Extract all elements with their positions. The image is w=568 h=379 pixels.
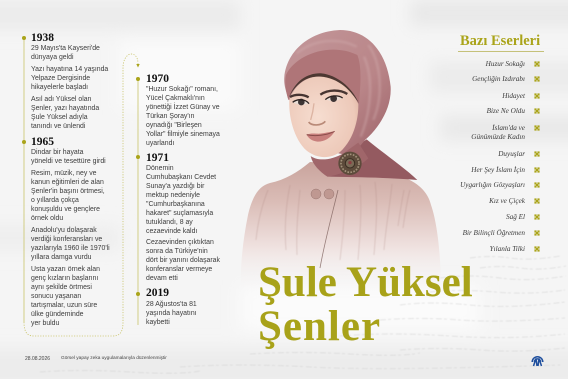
text: after prison: dört bir yanını dolaşarak xyxy=(146,256,220,264)
text: death: yaşında hayatını xyxy=(146,310,197,316)
works list: Kız ve Çiçek xyxy=(489,196,525,204)
works list: Bir Bilinçli Öğretmen xyxy=(463,228,525,236)
text: pen name: Şenler, yazı hayatında xyxy=(31,105,99,112)
works list: Duyuşlar xyxy=(498,150,525,158)
works list: Sağ El xyxy=(506,212,525,220)
text: film adaptation: uyarlandı xyxy=(146,140,174,146)
text: arrest: mektup nedeniyle xyxy=(146,192,200,198)
text: arrest: Dönemin xyxy=(146,164,174,172)
works list: İslam'da ve xyxy=(492,124,525,132)
text: birth: 29 Mayıs'ta Kayseri'de xyxy=(31,44,100,52)
text: conferences: yıllara damga vurdu xyxy=(31,254,92,260)
text: arrest: tutuklandı, 8 ay xyxy=(146,218,193,226)
text: faith xyxy=(31,148,106,164)
text: film adaptation: Türkan Şoray'ın xyxy=(146,112,194,120)
title: name xyxy=(258,259,473,350)
text: pen name: tanındı ve ünlendi xyxy=(31,123,85,130)
text: film adaptation: Yollar" filmiyle sinemaya xyxy=(146,130,220,138)
text: faith: Dindar bir hayata xyxy=(31,148,83,156)
title: name: Şenler xyxy=(258,303,381,350)
text: birth xyxy=(31,44,100,60)
text: conferences: yazılarıyla 1960 ile 1970'li xyxy=(31,244,110,252)
text: influence: genç kızların başlarını xyxy=(31,274,98,282)
facial features xyxy=(290,91,347,142)
text: education: konuşuldu ve gençlere xyxy=(31,206,100,212)
icon: agency logo xyxy=(531,356,544,366)
dress xyxy=(241,162,441,292)
works list: Hidayet xyxy=(502,92,525,100)
text: film adaptation: yönettiği İzzet Günay ve xyxy=(146,104,220,110)
works list: Günümüzde Kadın xyxy=(471,132,525,140)
year 1965: 1965 xyxy=(31,136,54,148)
text: arrest: Cumhubaşkanı Cevdet xyxy=(146,174,216,180)
text: after prison: konferanslar vermeye xyxy=(146,266,212,272)
footer date: 28.08.2026 xyxy=(25,356,50,362)
text: influence: sonucu yaşanan xyxy=(31,292,81,300)
text: arrest xyxy=(146,164,216,234)
text: influence: tartışmalar, uzun süre xyxy=(31,302,97,308)
text: after prison: Cezaevinden çıktıktan xyxy=(146,238,214,246)
timeline column two xyxy=(146,73,220,326)
year 2019: 2019 xyxy=(146,287,169,299)
works list: Gençliğin Izdırabı xyxy=(472,74,525,82)
text: arrest: "Cumhurbaşkanına xyxy=(146,200,205,208)
text: education xyxy=(31,170,105,222)
panel: selected works xyxy=(458,33,544,252)
text: early writing xyxy=(31,66,108,90)
text: pen name: Şule Yüksel adıyla xyxy=(31,114,88,121)
text: death: 28 Ağustos'ta 81 xyxy=(146,300,197,308)
text: film adaptation: oynadığı "Birleşen xyxy=(146,122,202,128)
text: influence: aynı şekilde örtmesi xyxy=(31,284,92,290)
text: education: örnek oldu xyxy=(31,214,63,222)
works list: Her Şey İslam İçin xyxy=(471,166,525,174)
text: after prison: devam etti xyxy=(146,274,178,282)
text: influence xyxy=(31,266,100,326)
text: education: o yıllarda çokça xyxy=(31,196,79,204)
text: death: kaybetti xyxy=(146,318,170,326)
text: conferences: Anadolu'yu dolaşarak xyxy=(31,226,97,234)
text: after prison xyxy=(146,238,220,282)
year 1971: 1971 xyxy=(146,152,169,164)
text: film adaptation: Yücel Çakmaklı'nın xyxy=(146,94,205,102)
footer note: Görsel yapay zeka uygulamalarıyla düzenlenmiştir xyxy=(61,356,167,361)
works list: Huzur Sokağı xyxy=(486,60,525,68)
text: film adaptation: "Huzur Sokağı" romanı, xyxy=(146,86,218,92)
text: death xyxy=(146,300,197,326)
works list: Yılanla Tilki xyxy=(490,244,525,252)
text: faith: yöneldi ve tesettüre girdi xyxy=(31,158,106,164)
text: influence: Usta yazarı örnek alan xyxy=(31,266,100,272)
text: early writing: hikayelerle başladı xyxy=(31,84,88,90)
works list: Uygarlığın Gözyaşları xyxy=(460,180,525,188)
text: birth: dünyaya geldi xyxy=(31,54,74,60)
timeline column one xyxy=(31,32,110,326)
year 1970: 1970 xyxy=(146,73,169,85)
works list: Bize Ne Oldu xyxy=(487,106,525,114)
text: conferences: verdiği konferansları ve xyxy=(31,236,102,242)
text: pen name: Asıl adı Yüksel olan xyxy=(31,96,91,103)
text: film adaptation xyxy=(146,86,220,146)
text: early writing: Yazı hayatına 14 yaşında xyxy=(31,66,108,72)
year 1938: 1938 xyxy=(31,32,54,44)
text: early writing: Yelpaze Dergisinde xyxy=(31,74,90,82)
text: education: Şenler'in başını örtmesi, xyxy=(31,188,105,194)
head and headscarf xyxy=(284,30,417,180)
title: name: Şule Yüksel xyxy=(258,259,473,306)
text: conferences xyxy=(31,226,110,260)
text: pen name xyxy=(31,96,100,130)
text: education: Resim, müzik, ney ve xyxy=(31,170,96,176)
text: arrest: Sunay'a yazdığı bir xyxy=(146,182,204,190)
text: arrest: hakaret" suçlamasıyla xyxy=(146,210,213,216)
text: education: kanun eğitimleri de alan xyxy=(31,178,104,186)
heading: Bazı Eserleri: Bazı Eserleri xyxy=(460,33,540,49)
works list xyxy=(460,60,526,252)
text: influence: ülke gündeminde xyxy=(31,310,83,318)
text: influence: yer buldu xyxy=(31,320,59,326)
text: arrest: cezaevinde kaldı xyxy=(146,228,197,234)
text: after prison: sonra da Türkiye'nin xyxy=(146,248,208,254)
